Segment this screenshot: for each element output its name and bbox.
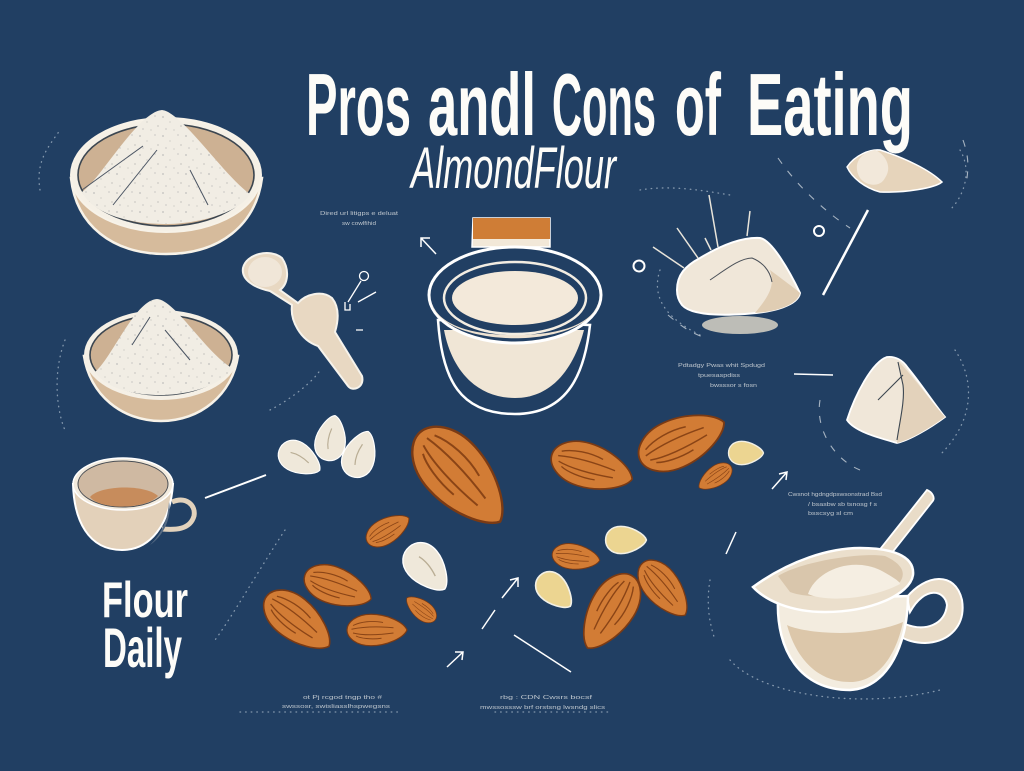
icon: whole almonds xyxy=(254,400,737,662)
small captions: swssosr, swisliasslhspwegsns xyxy=(282,704,390,710)
title: Eating xyxy=(747,55,913,154)
subtitle: AlmondFlour xyxy=(409,136,618,201)
icon: glass jar xyxy=(429,218,601,414)
title: andl xyxy=(428,55,536,154)
icon: flour lump xyxy=(634,195,800,334)
dashed arcs xyxy=(668,140,968,470)
small captions: bwsssor s fosn xyxy=(710,383,757,389)
small captions: Cwsnot hgdngdpswsonstrad Bsd xyxy=(788,492,882,498)
small captions: ot Pj rcgod tngp tho # xyxy=(303,695,383,701)
small captions xyxy=(282,211,882,711)
small captions: Pdtadgy Pwas whit Spdugd xyxy=(678,363,765,369)
icon: pitcher with spoon xyxy=(753,490,963,690)
icon: flour piece xyxy=(794,357,945,443)
icon: yellow almonds xyxy=(530,441,764,616)
icon: large flour bowl xyxy=(71,110,262,254)
icon: medium flour bowl xyxy=(84,299,238,421)
small captions: mwssosssw brf orstsng lwsndg slics xyxy=(480,705,605,711)
title: Cons xyxy=(552,55,656,154)
small captions: / bsasbw sb tsnosg f s xyxy=(808,502,877,508)
small captions: tpuesaspdiss xyxy=(698,373,740,379)
title: Pros xyxy=(306,55,411,154)
icon: small ring and tool marks xyxy=(345,272,376,330)
dotted dust marks xyxy=(39,130,969,712)
label: flour daily xyxy=(102,572,188,679)
label: flour daily: Flour xyxy=(102,572,188,628)
small captions: Dired url litigps e deluat xyxy=(320,211,399,217)
icon: shelled almonds xyxy=(273,413,459,601)
small captions: bsscsyg sl cm xyxy=(808,511,854,517)
title: of xyxy=(675,55,721,154)
label: flour daily: Daily xyxy=(103,616,182,679)
icon: almond top right xyxy=(814,150,942,295)
small captions: sw cowlfihid xyxy=(342,221,376,227)
icon: measuring spoon xyxy=(243,253,362,389)
small captions: rbg : CDN Cwsrs bocsf xyxy=(500,695,593,701)
icon: cup of tea xyxy=(73,458,266,550)
arrows xyxy=(421,238,787,672)
title xyxy=(306,55,913,154)
